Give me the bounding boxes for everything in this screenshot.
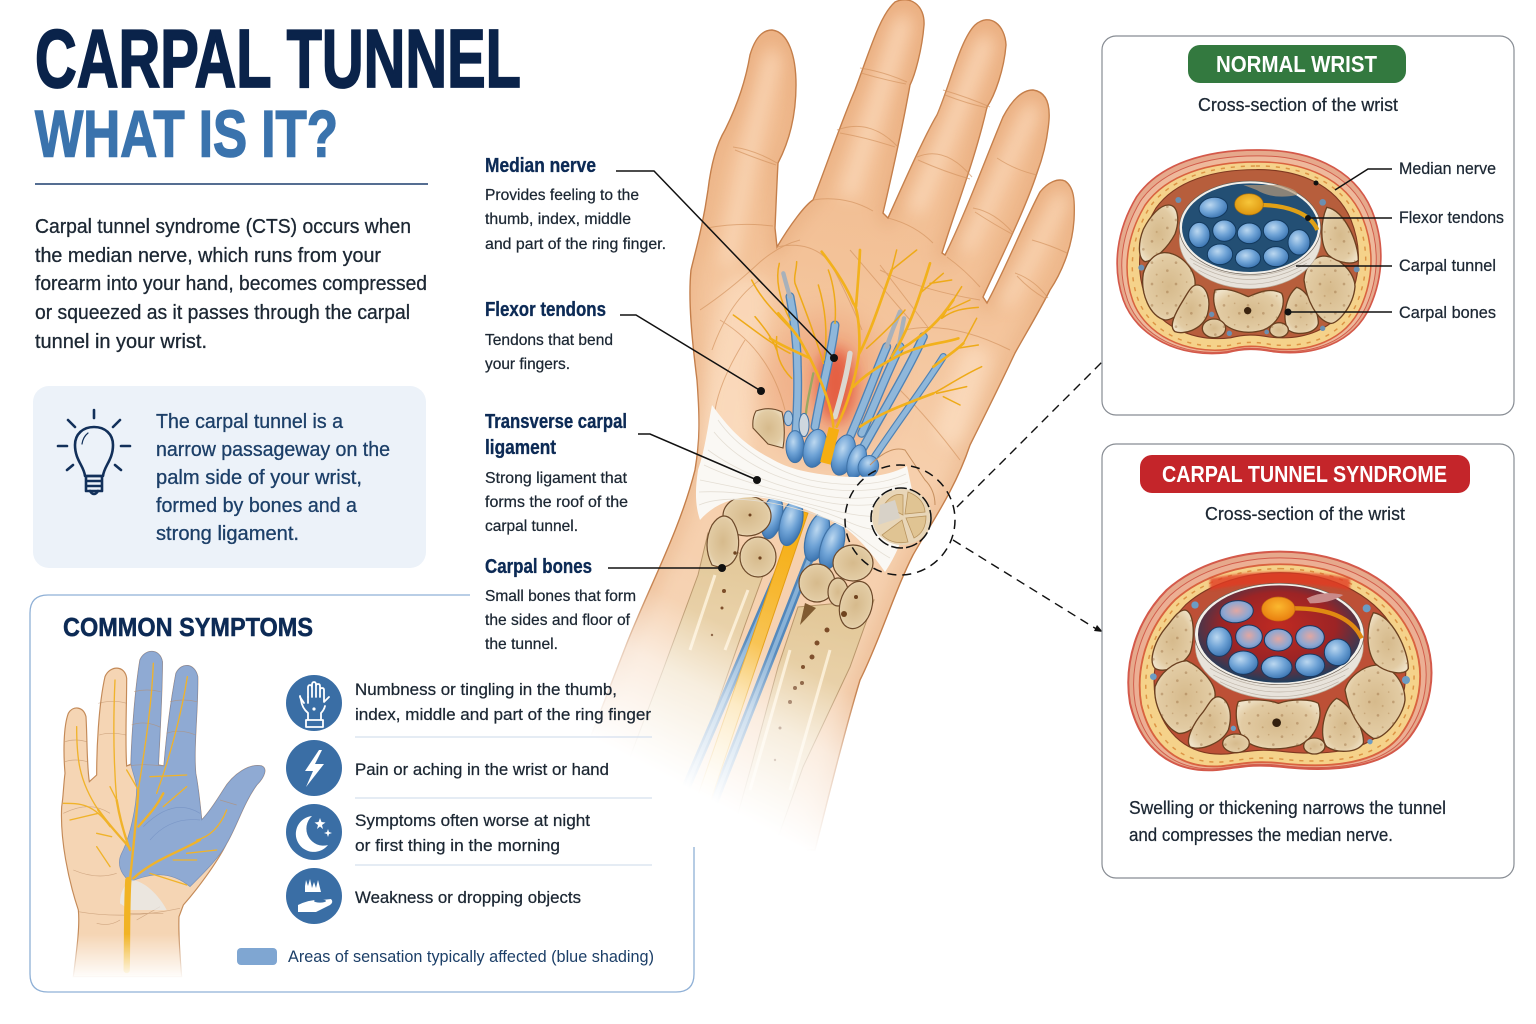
hand illustration with affected area bbox=[61, 651, 265, 977]
syndrome cross-section bbox=[1128, 552, 1431, 770]
labels: normal wrist: Median nerve bbox=[1399, 159, 1496, 178]
trapezium bone above ligament bbox=[753, 409, 784, 448]
symptom 4 icon: hand dropping objects bbox=[286, 868, 342, 924]
explanation text: and compresses the median nerve. bbox=[1129, 825, 1393, 845]
label: transverse carpal ligament: Strong ligament that bbox=[485, 470, 628, 487]
icon: light bulb bbox=[58, 410, 130, 494]
title: CARPAL TUNNEL bbox=[35, 12, 521, 105]
title bbox=[35, 12, 521, 170]
symptom 1 text: Numbness or tingling in the thumb, bbox=[355, 681, 617, 699]
label: carpal bones: the sides and floor of bbox=[485, 612, 631, 629]
intro paragraph: tunnel in your wrist. bbox=[35, 331, 207, 353]
label: median nerve: thumb, index, middle bbox=[485, 211, 631, 228]
symptom 3 text: Symptoms often worse at night bbox=[355, 812, 590, 830]
labels: normal wrist bbox=[1399, 159, 1504, 322]
callout text bbox=[156, 411, 390, 545]
badge: normal wrist: NORMAL WRIST bbox=[1216, 51, 1377, 77]
symptom 1 icon: hand bbox=[286, 675, 342, 731]
intro paragraph: forearm into your hand, becomes compressed bbox=[35, 273, 427, 295]
main wrist and hand illustration bbox=[570, 0, 1103, 860]
leader: median nerve bbox=[616, 171, 838, 362]
symptom 4 text: Weakness or dropping objects bbox=[355, 889, 581, 907]
label: flexor tendons: Flexor tendons bbox=[485, 299, 606, 321]
label: transverse carpal ligament bbox=[485, 411, 628, 535]
intro paragraph bbox=[35, 216, 427, 353]
intro paragraph: or squeezed as it passes through the carpal bbox=[35, 302, 410, 324]
symptom 1 text: index, middle and part of the ring finger bbox=[355, 706, 652, 724]
label: transverse carpal ligament: carpal tunnel. bbox=[485, 518, 578, 535]
labels: normal wrist: Flexor tendons bbox=[1399, 208, 1504, 227]
symptom 3 text bbox=[355, 812, 590, 855]
subheading: Cross-section of the wrist bbox=[1205, 504, 1405, 524]
median nerve branches in palm bbox=[733, 250, 982, 463]
symptom 1 text bbox=[355, 681, 652, 724]
finger creases and palm lines bbox=[700, 68, 1067, 460]
callout text: narrow passageway on the bbox=[156, 439, 390, 461]
transverse carpal ligament bbox=[696, 405, 912, 572]
normal wrist cross-section bbox=[1117, 150, 1381, 354]
label: transverse carpal ligament: ligament bbox=[485, 437, 556, 459]
leader: flexor tendons bbox=[620, 315, 765, 395]
explanation text bbox=[1129, 798, 1446, 845]
label: carpal bones: the tunnel. bbox=[485, 636, 558, 653]
skin fold around wrist bone bbox=[870, 449, 935, 505]
badge: carpal tunnel syndrome bbox=[1140, 455, 1470, 493]
labels: normal wrist: Carpal tunnel bbox=[1399, 256, 1496, 275]
leaders: normal wrist bbox=[1284, 169, 1392, 316]
callout text: formed by bones and a bbox=[156, 495, 358, 517]
forearm bones bbox=[640, 532, 875, 810]
label: flexor tendons: your fingers. bbox=[485, 356, 570, 373]
callout text: The carpal tunnel is a bbox=[156, 411, 344, 433]
symptom 3 text: or first thing in the morning bbox=[355, 837, 560, 855]
forearm tendons and median nerve bbox=[688, 511, 813, 792]
badge: carpal tunnel syndrome: CARPAL TUNNEL SYNDROME bbox=[1162, 461, 1447, 487]
symptom 3 icon: moon and stars bbox=[286, 804, 342, 860]
label: median nerve: Median nerve bbox=[485, 155, 596, 177]
dashed arrow to normal wrist bbox=[957, 362, 1102, 507]
subtitle: WHAT IS IT? bbox=[35, 96, 338, 170]
symptom 2 text: Pain or aching in the wrist or hand bbox=[355, 761, 609, 779]
label: median nerve: Provides feeling to the bbox=[485, 187, 639, 204]
wrist cross-section bone detail bbox=[872, 489, 932, 545]
callout text: palm side of your wrist, bbox=[156, 467, 362, 489]
symptom 2 icon: lightning bolt bbox=[286, 740, 342, 796]
badge: normal wrist bbox=[1188, 45, 1406, 83]
panel: common symptoms bbox=[30, 595, 694, 992]
label: carpal bones: Small bones that form bbox=[485, 588, 636, 605]
label: flexor tendons: Tendons that bend bbox=[485, 332, 613, 349]
labels: normal wrist: Carpal bones bbox=[1399, 303, 1496, 322]
intro paragraph: the median nerve, which runs from your bbox=[35, 245, 381, 267]
label: carpal bones bbox=[485, 556, 636, 653]
panel: normal wrist bbox=[1102, 36, 1514, 415]
label: carpal bones: Carpal bones bbox=[485, 556, 592, 578]
callout text: strong ligament. bbox=[156, 523, 299, 545]
dashed callout circles bbox=[845, 465, 955, 575]
leader: carpal bones bbox=[608, 564, 726, 572]
intro paragraph: Carpal tunnel syndrome (CTS) occurs when bbox=[35, 216, 411, 238]
label: median nerve bbox=[485, 155, 666, 253]
hand silhouette bbox=[570, 0, 1074, 850]
subheading: Cross-section of the wrist bbox=[1198, 95, 1398, 115]
heading: common symptoms: COMMON SYMPTOMS bbox=[63, 612, 313, 642]
dashed arrow to carpal tunnel syndrome bbox=[953, 540, 1103, 632]
label: transverse carpal ligament: forms the roof of the bbox=[485, 494, 628, 511]
explanation text: Swelling or thickening narrows the tunnel bbox=[1129, 798, 1446, 818]
label: flexor tendons bbox=[485, 299, 613, 373]
panel: carpal tunnel syndrome bbox=[1102, 444, 1514, 878]
flexor tendons above ligament bbox=[783, 273, 943, 481]
leader: transverse carpal ligament bbox=[638, 434, 761, 484]
legend: blue shading: Areas of sensation typically affected (blue shading) bbox=[288, 948, 654, 966]
callout: what the carpal tunnel is bbox=[33, 386, 426, 568]
label: transverse carpal ligament: Transverse carpal bbox=[485, 411, 627, 433]
label: median nerve: and part of the ring finger. bbox=[485, 236, 666, 253]
tendon bulbs and carpal bones below ligament bbox=[707, 493, 878, 632]
